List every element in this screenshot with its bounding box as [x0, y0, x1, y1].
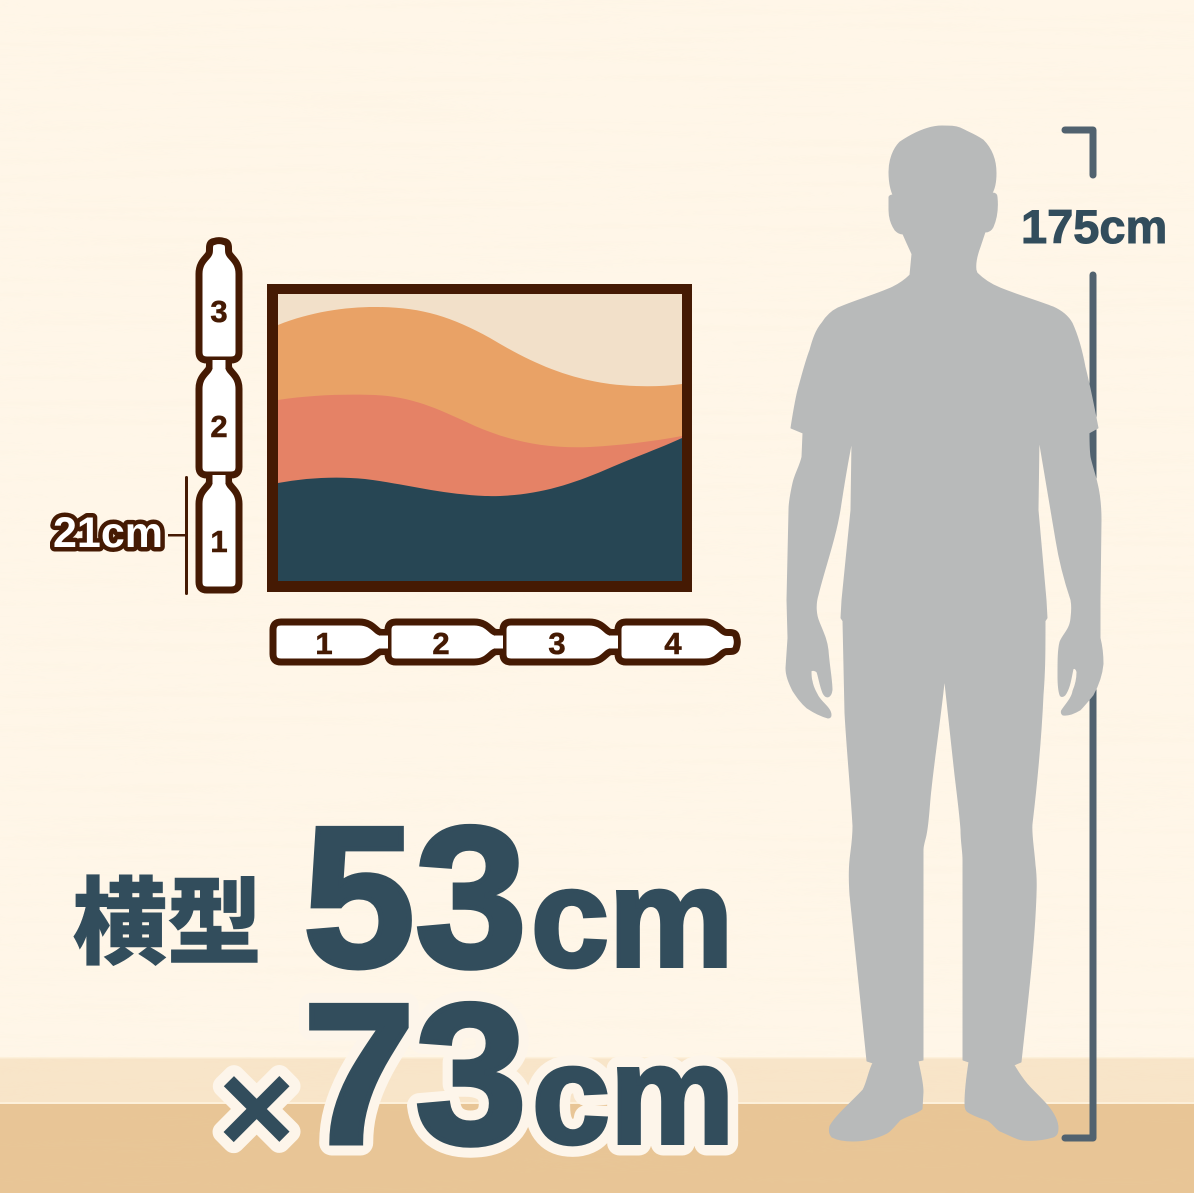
bottle number 1: 1 [315, 626, 333, 661]
bottle number 3: 3 [210, 294, 228, 329]
bottle number 2: 2 [210, 409, 228, 444]
height value: 53cm [303, 786, 733, 1009]
height value: 53cm: 53 [303, 786, 527, 1009]
cream outline [218, 963, 734, 1186]
orange wave [278, 307, 682, 581]
dark glyphs: cm [532, 1016, 734, 1173]
dark glyphs [218, 963, 734, 1186]
baseboard [0, 1057, 1194, 1104]
human silhouette [786, 126, 1103, 1141]
height value: 53cm: cm [531, 839, 733, 996]
vertical bottle stack [199, 241, 239, 590]
dark glyphs: 73 [303, 963, 527, 1186]
orientation label: 横型 [72, 871, 262, 977]
horizontal bottle row [273, 622, 737, 662]
cream outline: cm [532, 1016, 734, 1173]
label: 21cm: 21cm [53, 509, 163, 557]
bottle number 1: 1 [210, 524, 228, 559]
cream outline: × [218, 1034, 295, 1181]
salmon wave [278, 395, 682, 581]
cream outline: 73 [303, 963, 527, 1186]
width value: ×73cm [218, 963, 734, 1186]
framed artwork [267, 284, 692, 592]
navy wave [278, 438, 682, 581]
bottle height bracket [168, 476, 188, 595]
height ruler [1065, 130, 1093, 1138]
dark glyphs: × [218, 1034, 295, 1181]
bottle number 2: 2 [432, 626, 450, 661]
bottle number 3: 3 [548, 626, 566, 661]
label: 175cm: 175cm [1021, 200, 1167, 253]
floor [0, 1103, 1194, 1193]
bottle number 4: 4 [664, 626, 682, 661]
